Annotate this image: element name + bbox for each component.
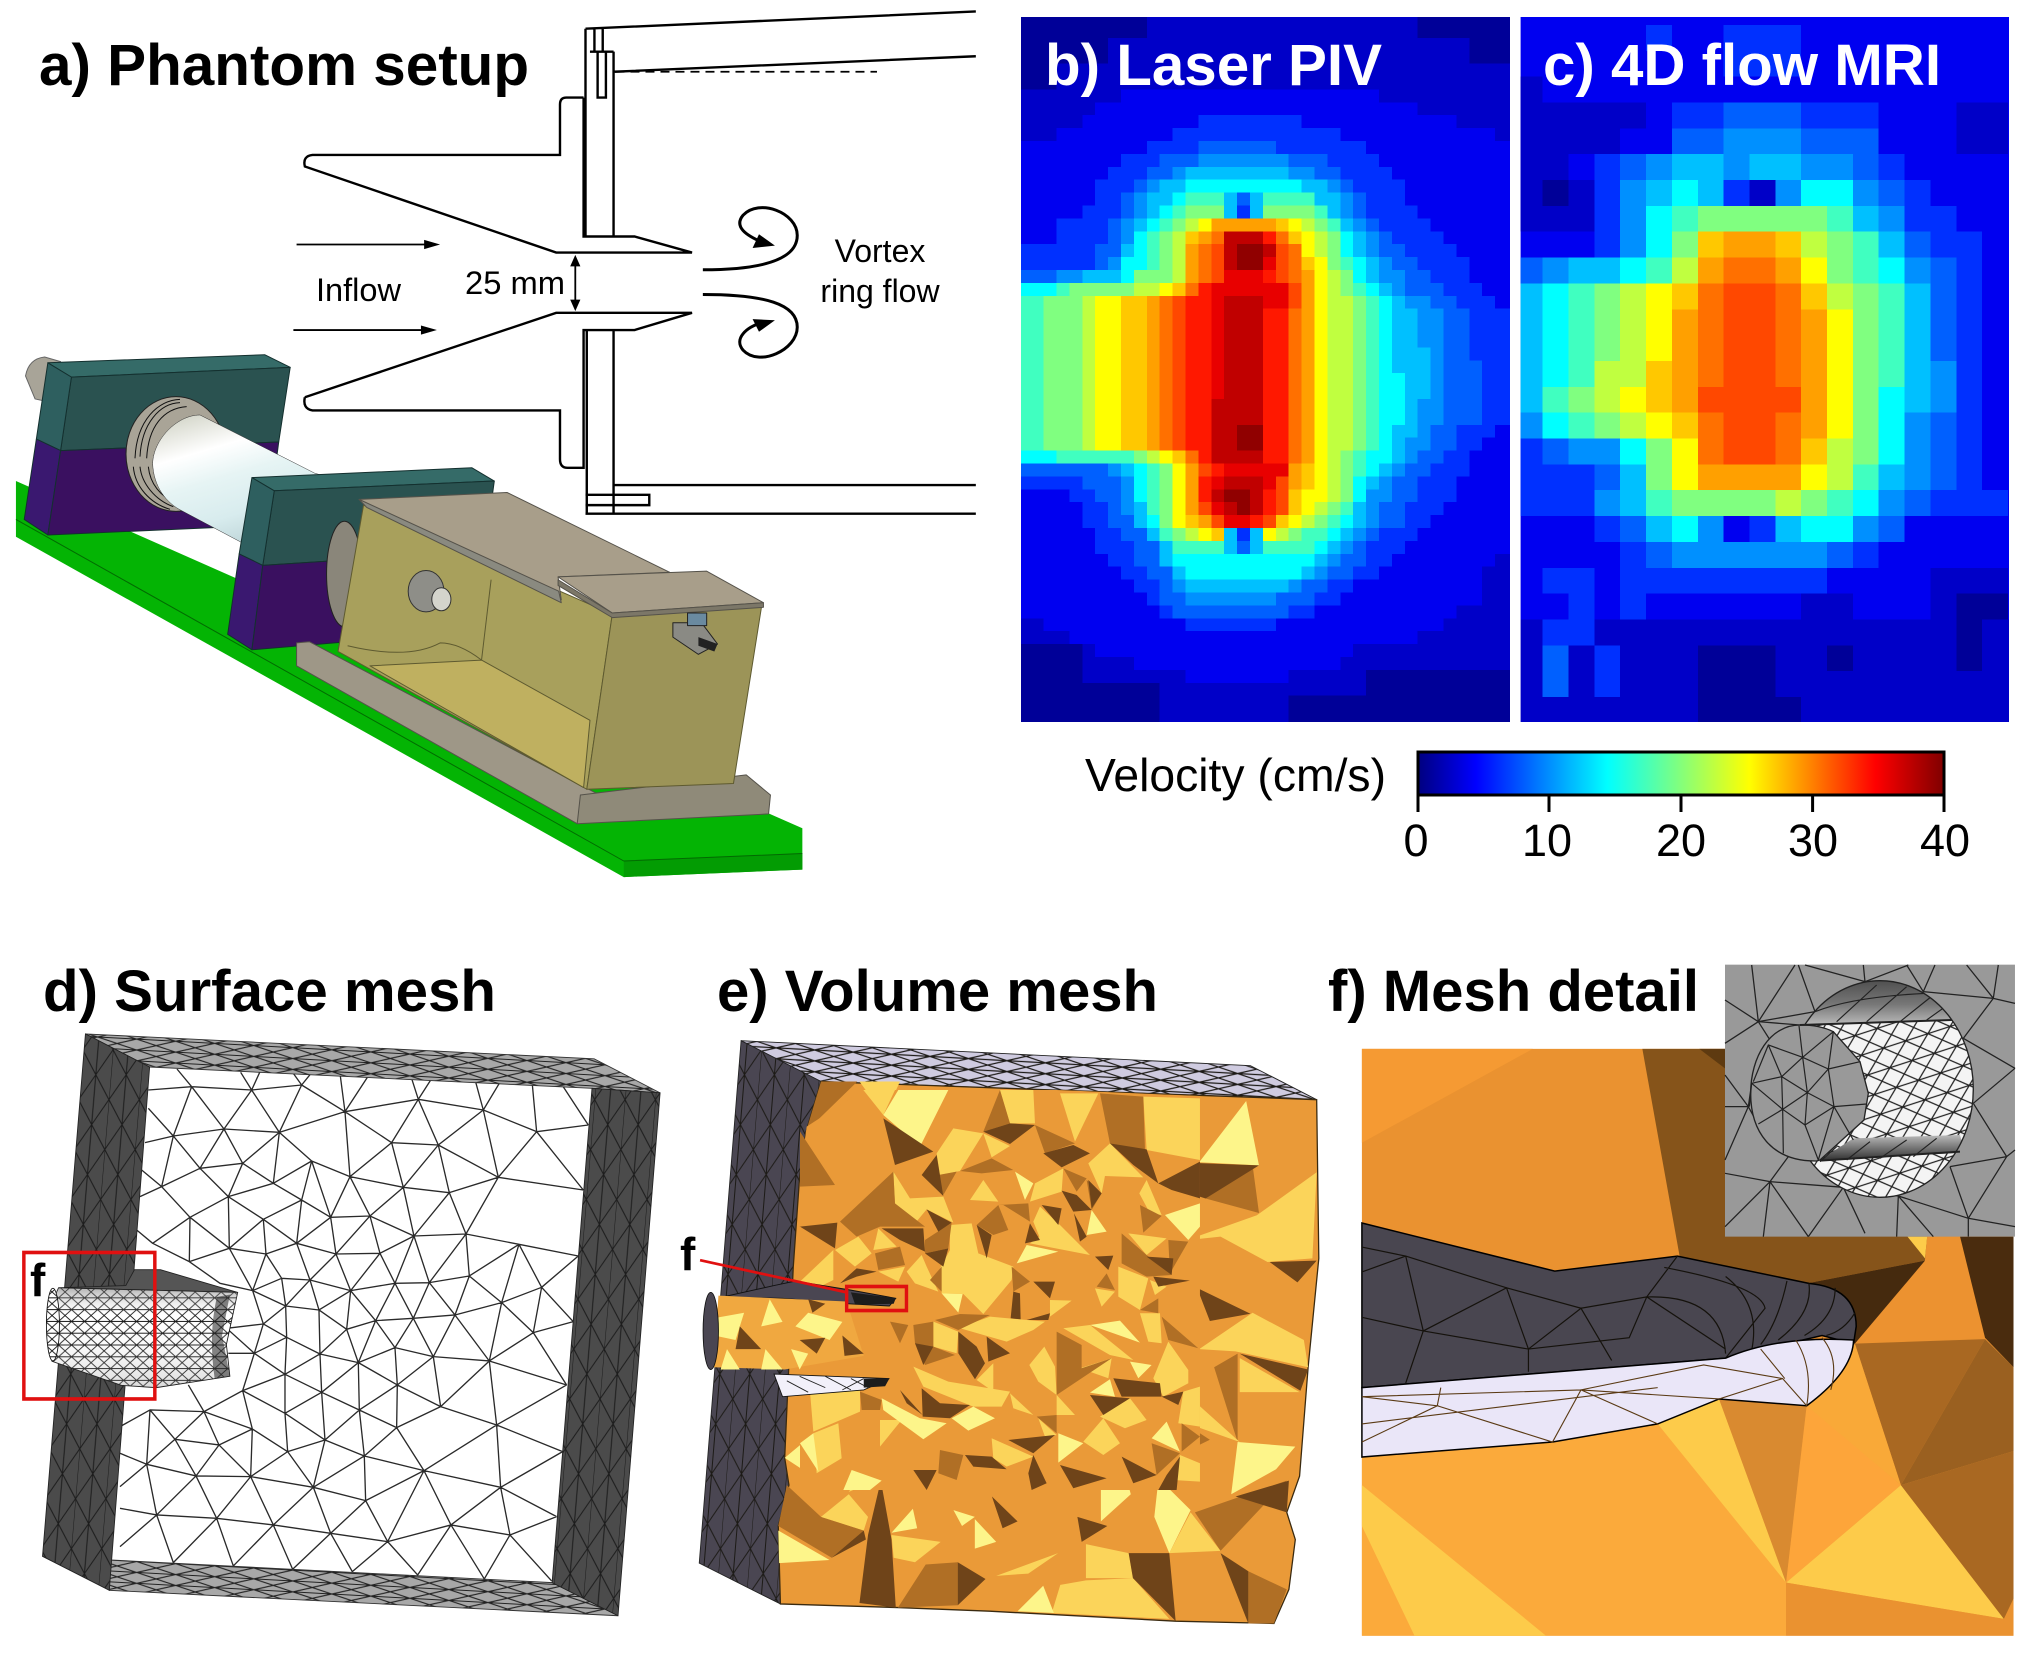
mesh box xyxy=(24,1034,660,1616)
central yellow facets xyxy=(800,1090,1200,1482)
heading: c) 4D flow MRI: c) 4D flow MRI xyxy=(1543,33,1941,98)
panel b: Laser PIV velocity heatmap xyxy=(1018,12,1521,734)
ticks and tick labels xyxy=(1403,795,1970,866)
cut surface base xyxy=(778,1082,1319,1623)
box base frame xyxy=(297,642,770,824)
ticks and tick labels: 0 xyxy=(1403,815,1429,866)
volume mesh box xyxy=(699,1041,1319,1623)
label: f: f xyxy=(30,1254,46,1306)
label: 25 mm: 25 mm xyxy=(465,265,565,301)
facets: pale yellow xyxy=(778,1101,1295,1613)
inset hole xyxy=(1749,973,1973,1197)
heading: e) Volume mesh: e) Volume mesh xyxy=(717,959,1158,1024)
heatmap cells xyxy=(1018,12,1521,734)
red marker box f xyxy=(24,1252,155,1399)
red marker and leader line xyxy=(700,1260,906,1311)
ticks and tick labels: 20 xyxy=(1656,815,1706,866)
top and bottom bands xyxy=(85,1034,660,1616)
heading: d) Surface mesh: d) Surface mesh xyxy=(43,959,496,1024)
interior triangle mesh xyxy=(120,1069,588,1581)
panel d: surface mesh xyxy=(24,959,660,1616)
CAD model front part xyxy=(228,468,770,824)
facets: dark brown xyxy=(800,1163,1317,1623)
heatmap cells xyxy=(1517,0,2027,749)
heading: f) Mesh detail: f) Mesh detail xyxy=(1328,959,1699,1024)
facets: yellow xyxy=(821,1082,1317,1619)
central pale yellow facets xyxy=(800,1090,1200,1490)
left wall xyxy=(699,1041,821,1604)
label: Inflow: Inflow xyxy=(316,272,402,308)
left support block xyxy=(24,355,290,535)
top band xyxy=(741,1041,1317,1100)
ticks and tick labels: 40 xyxy=(1920,815,1970,866)
inset: inlet view in grey xyxy=(1725,965,2015,1237)
front support block xyxy=(228,468,494,650)
panel a: phantom setup xyxy=(16,11,976,877)
box lids xyxy=(359,492,763,618)
port tube xyxy=(408,571,451,612)
central dark brown facets xyxy=(800,1118,1200,1490)
label: Vortex ring flow: Vortex xyxy=(835,233,925,269)
heading: a) Phantom setup: a) Phantom setup xyxy=(39,33,529,98)
heading: b) Laser PIV: b) Laser PIV xyxy=(1045,33,1382,98)
ticks and tick labels: 10 xyxy=(1522,815,1572,866)
arrowheads xyxy=(421,234,775,335)
lavender tube wall xyxy=(1362,1338,1854,1457)
colour bar title: Velocity (cm/s) xyxy=(1085,749,1386,801)
schematic: nozzle line drawing xyxy=(293,11,976,514)
water box walls xyxy=(327,505,762,789)
close-up of volume mesh xyxy=(1362,1049,2014,1636)
inset outer mesh xyxy=(1725,965,2015,1237)
panel e: volume mesh xyxy=(680,959,1319,1623)
rear end cap xyxy=(26,357,61,402)
panel c: 4D flow MRI velocity heatmap xyxy=(1517,0,2027,749)
CAD model of phantom rig xyxy=(16,355,802,877)
inlet tube slice xyxy=(703,1281,896,1397)
jet gradient bar xyxy=(1418,752,1944,795)
facets: mid brown xyxy=(778,1082,1287,1623)
green base plate xyxy=(16,481,802,877)
label: Vortex ring flow: ring flow xyxy=(820,273,940,309)
ticks and tick labels: 30 xyxy=(1788,815,1838,866)
flow inlet tube xyxy=(46,1270,238,1388)
label: f: f xyxy=(680,1228,696,1280)
dark tube wall xyxy=(1362,1223,1856,1388)
central facets of volume mesh xyxy=(800,1090,1200,1490)
label: Vortex ring flow xyxy=(820,233,940,309)
inlet tube and marker xyxy=(700,1260,906,1397)
cylinder with threaded ring xyxy=(126,397,340,553)
valve xyxy=(673,613,718,654)
colour bar legend xyxy=(1085,749,1970,866)
side walls xyxy=(43,1034,660,1616)
panel f: mesh detail xyxy=(1328,959,2015,1636)
central mid brown facets xyxy=(800,1090,1200,1480)
